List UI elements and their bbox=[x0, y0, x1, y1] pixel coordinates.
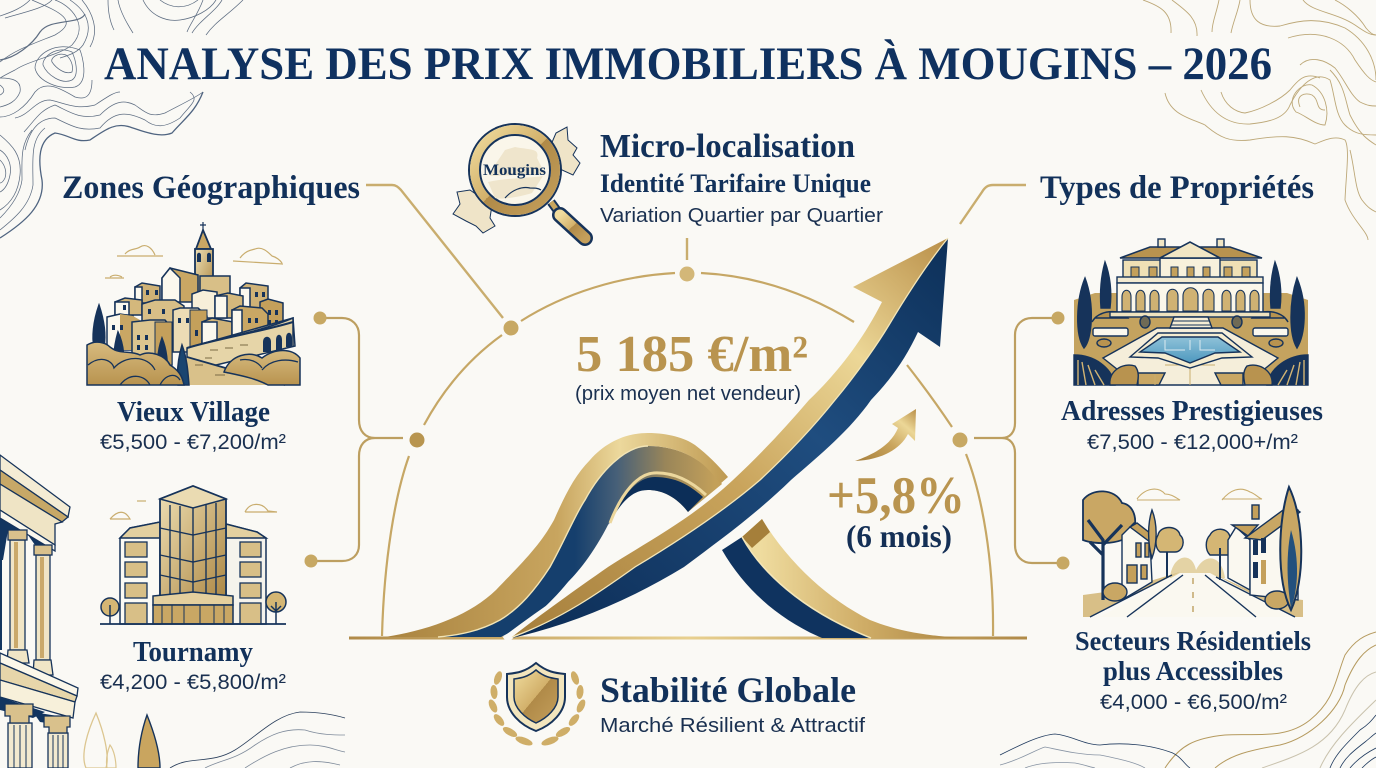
right wing bbox=[226, 524, 266, 624]
label: adresses prestigieuses: Adresses Prestigieuses bbox=[1061, 396, 1323, 427]
decoration: navy topographic lines bottom-right bbox=[1000, 715, 1376, 768]
hump gold edge bbox=[438, 446, 648, 637]
icon: magnifier over map bbox=[453, 124, 585, 238]
right houses bbox=[1228, 527, 1250, 590]
label: vieux village: Vieux Village bbox=[117, 397, 270, 428]
bushes right bbox=[224, 350, 300, 385]
urns bbox=[1140, 316, 1150, 328]
ground left bbox=[1083, 572, 1180, 617]
upper columns bbox=[10, 540, 25, 650]
podium bbox=[153, 592, 233, 605]
roof bbox=[1120, 247, 1262, 258]
hump ribbon gold bbox=[385, 433, 728, 637]
background trees bbox=[1170, 558, 1225, 578]
fans bbox=[1074, 355, 1115, 385]
back houses bbox=[115, 283, 283, 332]
rising arrow gold bbox=[512, 238, 948, 637]
windows left and right bbox=[125, 542, 261, 598]
decoration: classical building at left bbox=[0, 455, 78, 768]
illustration: vieux village bbox=[87, 222, 300, 385]
icon: shield with laurel bbox=[487, 663, 587, 747]
clouds bbox=[1137, 489, 1262, 500]
upper windows bbox=[1131, 267, 1250, 277]
windows bbox=[112, 290, 278, 350]
tower spire bbox=[200, 222, 206, 230]
left house bbox=[1122, 523, 1152, 600]
stat: average price: 5 185 €/m² bbox=[576, 326, 808, 383]
illustration: residential street bbox=[1083, 487, 1303, 617]
gap around rising arrow bbox=[505, 320, 875, 640]
tall cypress bbox=[1280, 487, 1301, 610]
price: secteurs résidentiels: €4,000 - €6,500/m² bbox=[1100, 691, 1287, 714]
clouds bbox=[110, 501, 277, 519]
decoration: topographic lines top-right bbox=[1143, 0, 1376, 240]
hump navy crescent bbox=[608, 477, 703, 525]
trees bbox=[101, 598, 119, 616]
cypresses bbox=[93, 305, 105, 347]
hedges bbox=[1093, 328, 1128, 336]
price: tournamy: €4,200 - €5,800/m² bbox=[100, 671, 286, 694]
arch bbox=[382, 266, 993, 636]
navy soffit bbox=[0, 512, 55, 560]
connector: micro-localisation to arch bbox=[686, 238, 688, 260]
lower columns bbox=[8, 723, 32, 768]
stat caption: (prix moyen net vendeur) bbox=[575, 383, 801, 405]
front houses bbox=[107, 314, 133, 350]
connector: left bracket bbox=[314, 318, 403, 561]
decoration: topographic lines top-left bbox=[0, 0, 243, 238]
decoration: cypress and plant bottom-left bbox=[84, 713, 160, 768]
garden ground bbox=[1074, 293, 1308, 385]
rising arrow highlight bbox=[512, 238, 948, 637]
text: marché résilient: Marché Résilient & Attractif bbox=[600, 714, 865, 737]
decoration: navy topographic lines bottom-left bbox=[170, 712, 345, 768]
connector: right bracket bbox=[974, 318, 1060, 563]
price: vieux village: €5,500 - €7,200/m² bbox=[100, 431, 286, 454]
descending ribbon bbox=[722, 519, 965, 638]
heading: zones géographiques: Zones Géographiques bbox=[62, 170, 360, 206]
connector: types to arrow bbox=[960, 185, 1026, 224]
ground floor bbox=[1117, 283, 1263, 312]
terrace bbox=[1110, 312, 1270, 317]
ground bbox=[100, 623, 286, 625]
connector: zones to arch bbox=[366, 185, 503, 318]
label: secteurs résidentiels line 1: Secteurs Résidentiels bbox=[1075, 626, 1311, 656]
road bbox=[1100, 573, 1290, 617]
tower bbox=[160, 486, 226, 600]
bracket nodes bbox=[304, 312, 1070, 570]
rising arrow blue bbox=[512, 238, 948, 638]
bottom planters bbox=[1138, 373, 1165, 385]
illustration: tournamy building bbox=[100, 486, 286, 624]
church bbox=[200, 276, 230, 306]
icon: small growth arrow bbox=[855, 409, 916, 461]
text: variation: Variation Quartier par Quartier bbox=[600, 205, 883, 227]
illustration: prestigious villa bbox=[1074, 239, 1308, 385]
entablature lower bbox=[0, 653, 78, 696]
label: secteurs résidentiels line 2: plus Accessibles bbox=[1103, 656, 1283, 686]
hump rib highlight bbox=[610, 473, 706, 523]
right tree mid bbox=[1206, 529, 1230, 555]
text: micro-localisation heading: Micro-localisation bbox=[600, 128, 855, 165]
ground right bbox=[1212, 573, 1303, 617]
baseline bbox=[349, 636, 1027, 640]
upper floor bbox=[1123, 260, 1257, 278]
pool bbox=[1130, 333, 1252, 368]
road bbox=[180, 357, 285, 385]
icon: magnifier over map: Mougins bbox=[483, 162, 546, 179]
balustrade bbox=[1117, 277, 1263, 283]
cornice bbox=[0, 455, 70, 517]
clouds bbox=[105, 246, 283, 278]
wall and yard bbox=[187, 318, 295, 372]
heading: types de propriétés: Types de Propriétés bbox=[1040, 170, 1314, 206]
left tree bbox=[1083, 491, 1135, 543]
text: stabilité globale: Stabilité Globale bbox=[600, 670, 856, 710]
title: ANALYSE DES PRIX IMMOBILIERS À MOUGINS – 2026 bbox=[104, 38, 1272, 90]
bushes left bbox=[87, 342, 184, 385]
text: identité tarifaire: Identité Tarifaire Unique bbox=[600, 169, 871, 198]
cypresses bbox=[1078, 278, 1091, 348]
stat: growth: +5,8% bbox=[827, 467, 965, 525]
pavement bbox=[1103, 328, 1278, 385]
stat: period: (6 mois) bbox=[846, 518, 952, 554]
chart: price curve bbox=[385, 238, 965, 640]
price: adresses prestigieuses: €7,500 - €12,000+/m² bbox=[1087, 431, 1298, 454]
label: tournamy: Tournamy bbox=[133, 637, 253, 668]
hump ribbon middle bbox=[438, 446, 722, 637]
left wing bbox=[120, 522, 160, 624]
decoration: topographic lines bottom-right bbox=[1165, 632, 1376, 768]
